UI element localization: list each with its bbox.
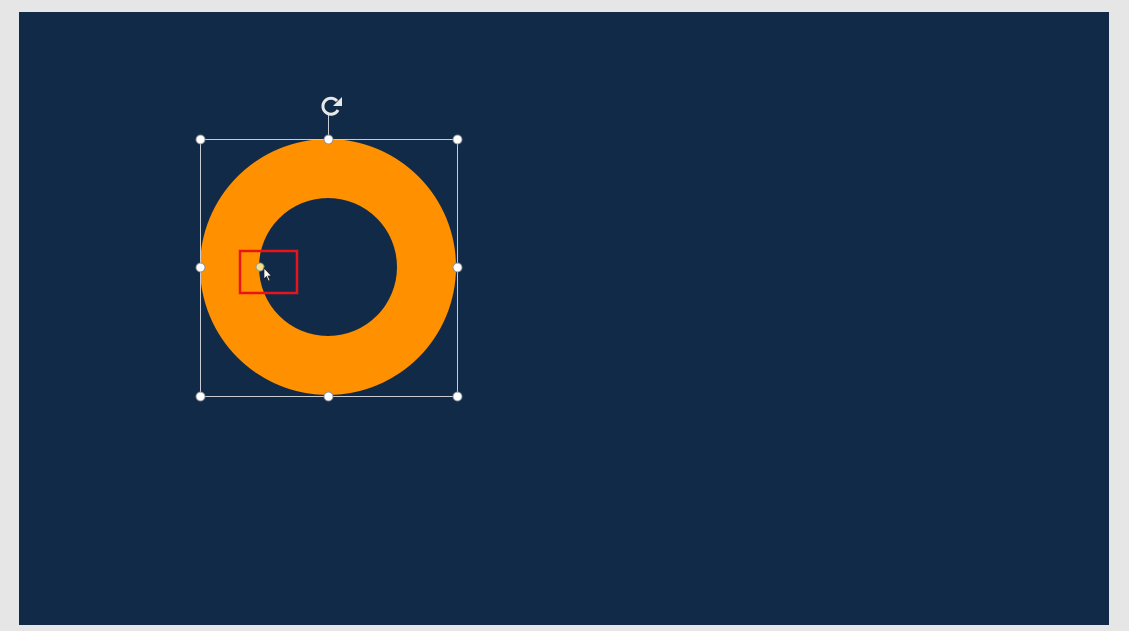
icon: adjustment handle xyxy=(256,263,264,271)
donut shape xyxy=(200,139,456,395)
icon: rotate handle xyxy=(323,97,342,114)
callout: red highlight box xyxy=(240,251,297,293)
icon: mouse cursor xyxy=(264,268,272,281)
selection box with handles xyxy=(196,115,462,401)
